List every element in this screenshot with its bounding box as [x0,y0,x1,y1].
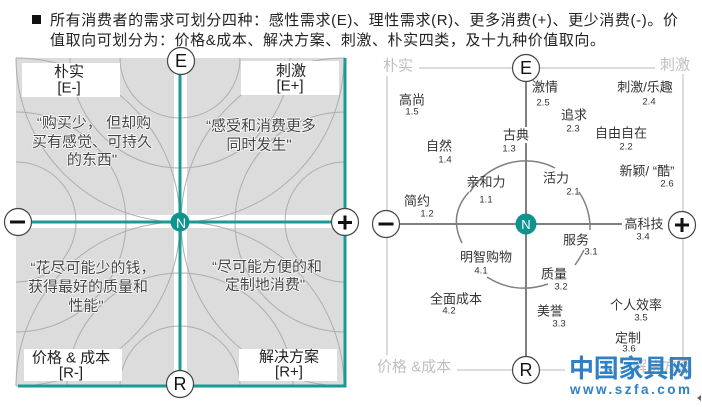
value 1.1: 亲和力 [466,174,506,190]
value 1.4: 自然 [426,138,452,154]
node: R: R [520,360,532,380]
intro text block: 值取向可划分为：价格&成本、解决方案、刺激、朴实四类，及十九种价值取向。 [50,31,605,49]
node: E [512,54,540,82]
value 2.4 [617,80,673,108]
corner label: 朴实: 朴实 [383,58,413,74]
label: 朴实 [E-] [22,63,120,97]
value 3.4: 高科技 [624,216,664,232]
node: E: E [175,51,187,71]
value 1.3: 古典 [503,128,529,142]
label: 价格 & 成本 [R-]: [R-] [59,364,83,382]
watermark [569,355,693,397]
arc segments around N [456,161,590,288]
value 3.2: 质量 [541,266,567,282]
panel: nineteen value orientations map [372,54,696,384]
label: 解决方案 [R+] [239,348,337,381]
node: R [166,370,194,398]
value 2.6 [620,164,674,190]
quote: E-: “购买少， 但却购 [37,114,151,132]
value 3.5: 个人效率 [610,298,662,312]
node: R [512,356,540,384]
value 1.3: 1.3 [502,144,516,154]
quote: E+ [206,118,316,154]
value 1.2: 简约 [404,194,430,208]
node: E: E [520,58,532,78]
node: minus [4,208,32,236]
quote: R- [28,260,156,314]
quote: R+ [212,258,322,294]
quote: R+: “尽可能方便的和 [212,258,322,276]
value 4.2: 全面成本 [430,292,482,306]
quote: E-: 买有感觉、可持久 [32,134,152,150]
value 1.5: 高尚 [399,92,425,108]
value 3.1: 3.1 [584,246,598,258]
quote: E- [32,114,152,168]
value 3.6 [615,330,641,354]
value 3.4 [622,216,666,242]
quote: E-: 的东西" [67,152,117,168]
value 3.5: 3.5 [634,312,648,324]
panel: four needs quadrant diagram [4,48,358,398]
value 2.6: 2.6 [660,178,674,190]
value 2.3: 2.3 [566,124,580,134]
value 3.6: 3.6 [622,344,636,354]
node: minus [372,210,400,238]
value 3.3 [537,304,566,330]
value 2.2: 自由自在 [595,126,647,140]
watermark: www.szfa.com [569,382,690,397]
corner label: 刺激: 刺激 [660,56,690,74]
small page marker [697,395,701,401]
value 2.6: 新颖/ “酷” [620,164,674,178]
label: 价格 & 成本 [R-] [24,349,122,382]
intro text block: 所有消费者的需求可划分四种：感性需求(E)、理性需求(R)、更多消费(+)、更少消费(-)。价 [50,12,678,29]
label: 解决方案 [R+]: 解决方案 [259,348,319,366]
value 4.2: 4.2 [442,306,456,316]
value 1.2 [404,194,434,220]
intro text block [32,12,678,49]
value 3.3: 3.3 [552,318,566,330]
node: N [516,214,536,234]
quote: R-: 性能" [68,298,104,314]
value 3.1: 服务 [563,232,589,248]
value 2.2: 2.2 [619,142,633,152]
value 2.3 [561,108,587,134]
value 2.5 [532,80,558,108]
corner label: 解决方案: 解决方案 [632,358,692,376]
node: R: R [174,374,186,394]
value 4.1 [460,250,512,276]
node: N: N [176,215,186,231]
value 3.2: 3.2 [554,282,568,292]
value 4.1: 4.1 [474,266,488,276]
value 1.3 [502,127,532,154]
node: plus [332,208,358,236]
value 3.5 [610,298,662,324]
value 2.4: 2.4 [642,96,656,108]
watermark: 中国家具网 [569,355,693,383]
value 3.3: 美誉 [537,304,563,318]
quote: E+: 同时发生" [226,136,292,154]
value 1.1 [466,174,506,206]
value 1.4: 1.4 [438,154,452,166]
value 2.1: 2.1 [566,186,580,198]
value 2.2 [595,126,647,152]
value 2.5: 2.5 [536,98,550,108]
quote: E+: “感受和消费更多 [206,118,316,134]
label: 朴实 [E-]: 朴实 [54,64,84,80]
value 1.4 [426,138,452,166]
value 2.5: 激情 [532,80,558,94]
value 1.1: 1.1 [479,194,493,206]
corner label: 价格 &成本: 价格 &成本 [377,358,451,376]
quote: R-: 获得最好的质量和 [28,278,148,296]
label: 刺激 [E+]: 刺激 [276,62,306,80]
value 2.1 [543,170,580,198]
value 1.5 [399,92,425,118]
label: 刺激 [E+]: [E+] [276,78,304,94]
value 2.4: 刺激/乐趣 [617,80,673,94]
value 3.4: 3.4 [636,232,650,242]
quote: R-: “花尽可能少的钱， [30,260,156,276]
label: 朴实 [E-]: [E-] [57,80,81,96]
value 2.3: 追求 [561,108,587,122]
value 3.6: 定制 [615,330,641,346]
label: 价格 & 成本 [R-]: 价格 & 成本 [32,350,110,366]
value 3.2 [541,266,568,292]
node: N: N [521,217,531,232]
node: E [168,48,194,74]
value 4.1: 明智购物 [460,250,512,264]
value 2.1: 活力 [543,170,569,186]
node: plus [668,212,696,238]
value 4.2 [430,292,482,316]
value 1.5: 1.5 [405,106,419,118]
label: 刺激 [E+] [241,61,339,95]
node: N [170,212,190,232]
value 1.2: 1.2 [420,208,434,220]
value 3.1 [563,232,598,258]
quote: R+: 定制地消费" [225,276,305,294]
label: 解决方案 [R+]: [R+] [275,364,303,380]
